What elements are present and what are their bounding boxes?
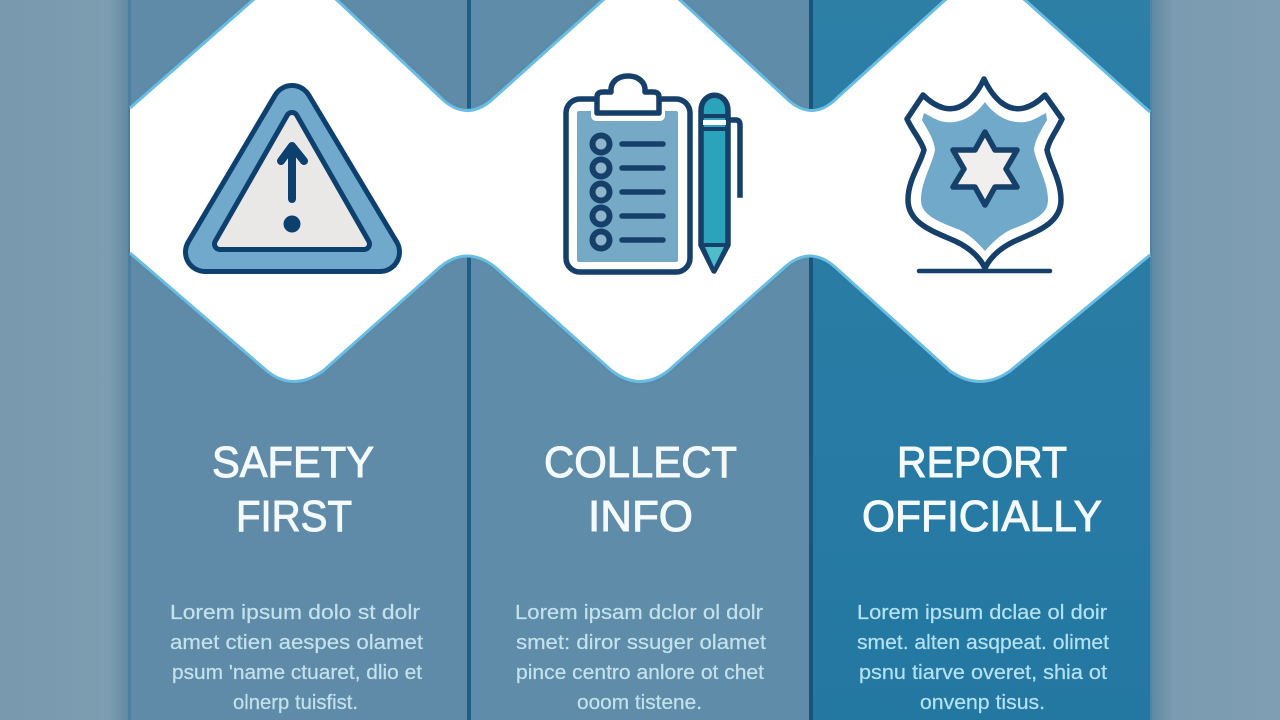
heading: safety first [212, 438, 374, 541]
text block: safety first body: psum 'name ctuaret, dlio et [172, 661, 422, 684]
heading: report officially: REPORT [897, 438, 1067, 487]
heading: collect info: INFO [588, 492, 693, 541]
heading: report officially: OFFICIALLY [862, 492, 1102, 541]
background: right margin [1152, 0, 1280, 720]
text block: collect info body: smet: diror ssuger olamet [516, 631, 766, 654]
heading: collect info: COLLECT [544, 438, 737, 487]
text block: collect info body: ooom tistene. [577, 691, 702, 714]
background: left margin [0, 0, 128, 720]
panel: safety first column [128, 0, 469, 720]
text block: safety first body [170, 601, 423, 714]
heading: safety first: SAFETY [212, 438, 374, 487]
white zigzag band [130, 0, 1150, 382]
icon: police shield badge [907, 79, 1062, 271]
heading: report officially [862, 438, 1102, 541]
heading: safety first: FIRST [236, 492, 352, 541]
text block: report officially body: smet. alten asqpeat. olimet [857, 631, 1109, 654]
text block: safety first body: amet ctien aespes olamet [170, 631, 423, 654]
text block: report officially body: Lorem ipsum dclae ol doir [857, 601, 1107, 624]
heading: collect info [544, 438, 737, 541]
text block: safety first body: olnerp tuisfist. [233, 691, 358, 714]
panel: report officially column [811, 0, 1152, 720]
text block: collect info body: pince centro anlore ot chet [516, 661, 764, 684]
text block: report officially body: psnu tiarve overet, shia ot [859, 661, 1107, 684]
text block: report officially body: onvenp tisus. [920, 691, 1045, 714]
icon: warning triangle [205, 105, 380, 252]
text block: report officially body [857, 601, 1109, 714]
text block: safety first body: Lorem ipsum dolo st dolr [170, 601, 420, 624]
text block: collect info body [515, 601, 766, 714]
text block: collect info body: Lorem ipsam dclor ol dolr [515, 601, 763, 624]
panel: collect info column [469, 0, 811, 720]
icon: clipboard checklist [566, 76, 740, 272]
